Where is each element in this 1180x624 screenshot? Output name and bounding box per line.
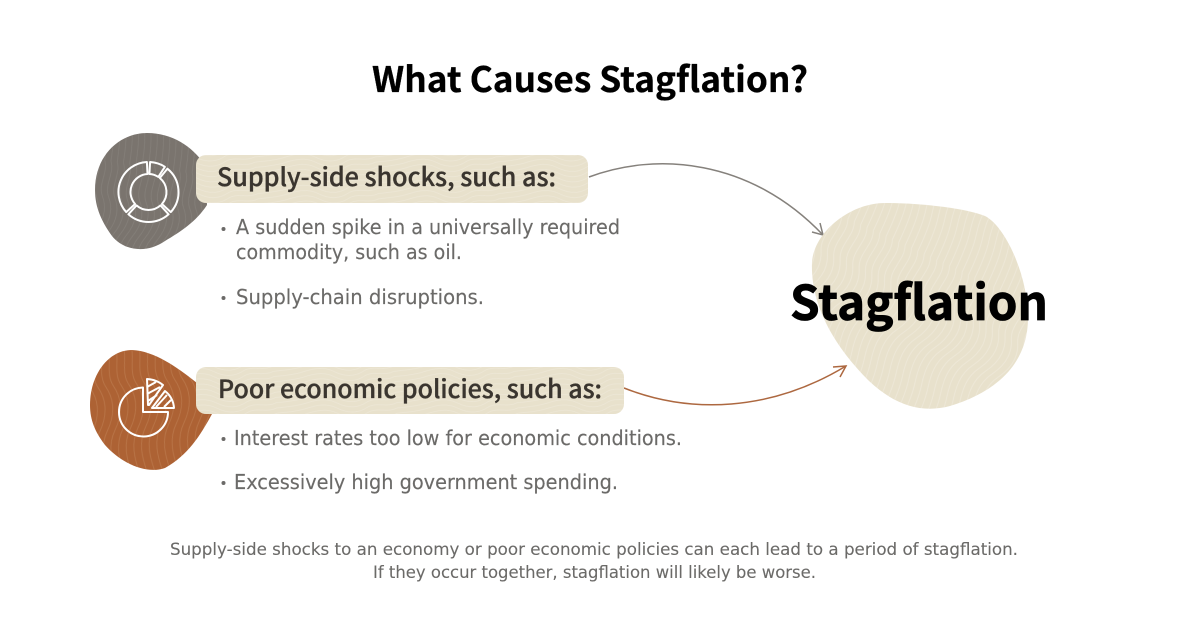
footer text: If they occur together, stagflation will likely be worse. xyxy=(373,563,816,583)
label: stagflation: Stagflation xyxy=(790,264,1048,334)
icon: ring chart on grey blob xyxy=(95,133,207,249)
bullet list: supply-side xyxy=(222,215,620,309)
icon: pie chart on rust blob xyxy=(90,350,212,470)
panel: poor economic policies xyxy=(90,350,682,494)
heading pill: policies xyxy=(196,367,624,414)
arrow: supply-side to stagflation xyxy=(589,164,823,235)
footer text xyxy=(170,540,1018,583)
arrow: poor policies to stagflation xyxy=(624,366,846,405)
footer text: Supply-side shocks to an economy or poor economic policies can each lead to a period of stagflation. xyxy=(170,540,1018,560)
heading pill: supply-side xyxy=(196,155,588,203)
heading pill: policies: Poor economic policies, such as: xyxy=(218,370,602,406)
bullet list: policies: Interest rates too low for economic conditions. xyxy=(234,426,682,450)
heading pill: supply-side: Supply-side shocks, such as: xyxy=(217,158,556,194)
blob: stagflation xyxy=(812,203,1028,409)
bullet list: supply-side: A sudden spike in a universally required xyxy=(236,215,620,239)
bullet list: policies: Excessively high government spending. xyxy=(234,470,618,494)
bullet list: supply-side: Supply-chain disruptions. xyxy=(236,285,484,309)
title: What Causes Stagflation? xyxy=(372,52,808,103)
panel: supply-side shocks xyxy=(95,133,620,309)
bullet list: supply-side: commodity, such as oil. xyxy=(236,240,462,264)
bullet list: policies xyxy=(222,426,682,494)
